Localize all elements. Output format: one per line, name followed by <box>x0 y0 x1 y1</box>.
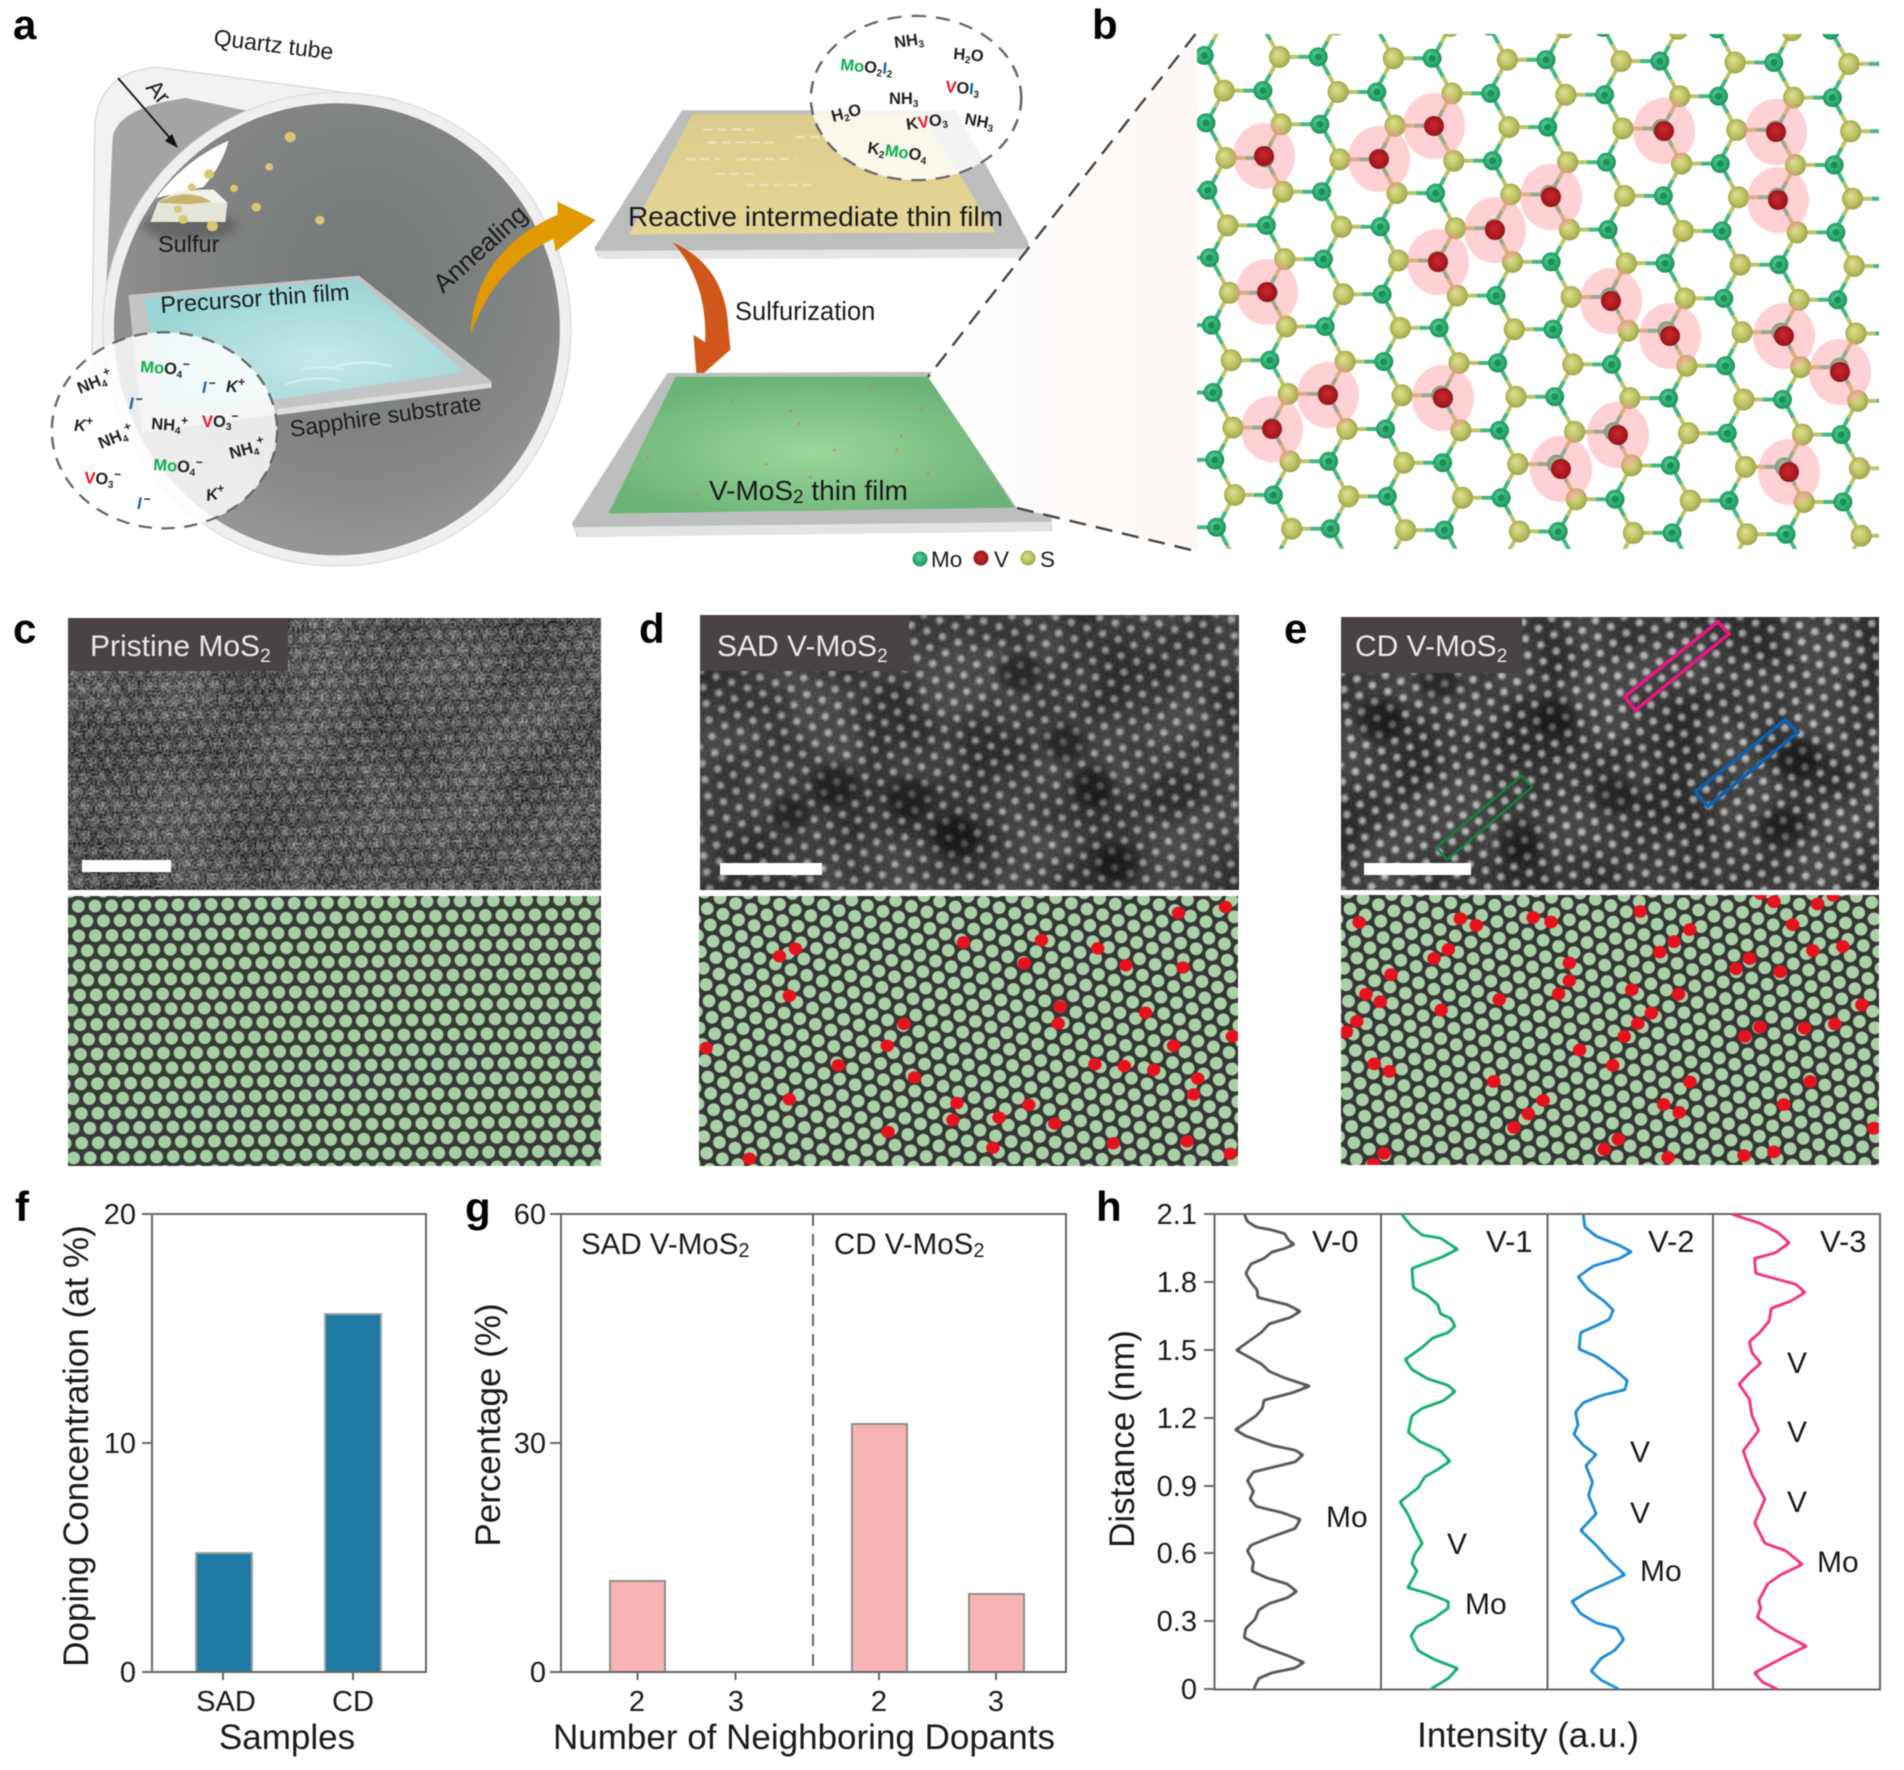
axes frame and ticks g <box>550 1214 1066 1680</box>
intermediate species labels: I <box>882 60 888 78</box>
ions in precursor: K <box>205 485 219 505</box>
y tick labels h: 0.6 <box>1157 1538 1197 1570</box>
y tick labels g: 30 <box>514 1428 546 1460</box>
ions in precursor: NH <box>151 415 176 435</box>
honeycomb lattice <box>1196 33 1880 550</box>
intermediate species labels: 3 <box>942 119 949 131</box>
ions in precursor: + <box>101 364 112 379</box>
arrow: annealing <box>471 202 596 335</box>
ions in precursor: − <box>136 392 143 406</box>
curve labels h: V-2 <box>1648 1224 1695 1259</box>
panel: d SAD V-MoS2 <box>639 605 1239 1166</box>
curve labels h: V <box>1630 1436 1650 1469</box>
panel: b atomic lattice <box>1090 0 1904 638</box>
axes frame and ticks h <box>1204 1214 1880 1690</box>
curve labels h: Mo <box>1465 1588 1507 1621</box>
group label: CD V-MoS2: CD V-MoS <box>834 1228 973 1261</box>
legend: atoms: S <box>1040 547 1055 572</box>
intermediate species labels: NH <box>889 90 913 108</box>
ions in precursor: VO <box>202 413 226 431</box>
panel label b: b <box>1092 1 1118 48</box>
group label: SAD V-MoS2: SAD V-MoS <box>581 1228 738 1261</box>
ions in precursor: VO <box>84 469 109 489</box>
x axis title h: Intensity (a.u.) <box>1417 1716 1639 1755</box>
ions in precursor: − <box>195 455 203 469</box>
scale bar e <box>1364 863 1471 875</box>
group label: CD V-MoS2: 2 <box>973 1240 984 1262</box>
ions in precursor: + <box>216 481 225 496</box>
x tick labels f: SAD <box>196 1686 256 1718</box>
ions in precursor: 4 <box>189 468 196 479</box>
y tick labels g <box>514 1199 546 1689</box>
curve labels h: V <box>1787 1347 1807 1380</box>
ions in precursor: − <box>209 376 216 390</box>
curve labels h: V-0 <box>1312 1224 1359 1259</box>
label: Precursor thin film: Precursor thin film <box>160 279 350 318</box>
ions in precursor: NH <box>96 427 125 453</box>
image title: SAD V-MoS2: 2 <box>877 646 888 667</box>
ions in precursor: K <box>226 378 238 396</box>
x tick labels g: 2 <box>871 1686 887 1718</box>
panel: c pristine MoS2 <box>13 605 601 1166</box>
ions in precursor: I <box>137 495 142 513</box>
curve labels h: Mo <box>1326 1501 1368 1534</box>
arrow: sulfurization <box>673 242 730 379</box>
label: Sulfurization: Sulfurization <box>735 298 875 326</box>
curve labels h: Mo <box>1817 1546 1859 1579</box>
sulfur boat and vapour dots <box>150 132 325 231</box>
curve: V-1 <box>1400 1214 1458 1690</box>
intermediate species labels: MoO <box>840 56 878 77</box>
vanadium dopant halos <box>1233 93 1871 505</box>
y tick labels f: 0 <box>120 1657 136 1689</box>
precursor film on sapphire substrate <box>129 276 491 433</box>
intermediate species labels: NH <box>893 31 919 52</box>
zoom wedge from film to lattice <box>928 34 1197 551</box>
image title: Pristine MoS2 <box>68 618 288 671</box>
ions in precursor: I <box>202 379 207 397</box>
STEM image d <box>700 615 1239 890</box>
ions in precursor: − <box>231 409 238 423</box>
image title: Pristine MoS2: 2 <box>260 646 271 667</box>
panel: g neighboring dopants bar chart <box>465 1184 1066 1757</box>
ions in precursor: MoO <box>153 456 191 477</box>
bar: CD <box>325 1314 381 1672</box>
ions in precursor: + <box>86 414 93 428</box>
curve labels h: V <box>1787 1486 1807 1519</box>
ions in precursor: − <box>182 357 190 371</box>
x axis title f: Samples <box>219 1718 355 1757</box>
curve labels h: V <box>1630 1497 1650 1530</box>
y axis title h: Distance (nm) <box>1103 1330 1142 1548</box>
intermediate species labels: O <box>846 101 863 121</box>
curve: V-2 <box>1572 1214 1632 1690</box>
panel: e CD V-MoS2 <box>1284 605 1881 1171</box>
intermediate species labels: K <box>866 139 881 159</box>
ions in precursor: 3 <box>107 480 114 491</box>
intermediate species labels: 2 <box>964 55 971 67</box>
atom map e with V sites <box>1340 887 1881 1171</box>
ions in precursor: 3 <box>226 422 232 433</box>
panel: a synthesis schematic <box>13 1 1055 572</box>
intermediate species labels: O <box>907 145 923 164</box>
arrow: Ar gas flow <box>118 75 178 148</box>
label: V-MoS2 thin film: 2 <box>793 487 804 508</box>
label: V-MoS2 thin film: thin film <box>804 475 908 506</box>
curve labels h: V-1 <box>1486 1224 1533 1259</box>
intermediate species labels: KVO <box>905 111 943 134</box>
intermediate species labels: 2 <box>876 68 883 80</box>
x tick labels f <box>196 1686 374 1718</box>
panel label c: c <box>13 605 36 652</box>
x axis title g: Number of Neighboring Dopants <box>553 1718 1055 1757</box>
ions in precursor: MoO <box>140 358 178 379</box>
x tick labels g: 3 <box>988 1686 1004 1718</box>
y tick labels h: 0 <box>1181 1674 1197 1706</box>
ions in precursor: 4 <box>174 426 181 437</box>
y tick labels h: 1.5 <box>1157 1335 1197 1367</box>
y axis title f: Doping Concentration (at %) <box>57 1225 96 1667</box>
panel label g: g <box>465 1184 491 1231</box>
intermediate species labels: H <box>829 105 846 126</box>
arrow: Ar gas flow: Ar <box>141 75 176 109</box>
atom map d with V sites <box>699 896 1239 1166</box>
line-profile box: V-3 <box>1625 622 1729 710</box>
y tick labels f: 10 <box>104 1428 136 1460</box>
ions in precursor: 4 <box>253 446 261 459</box>
image title: SAD V-MoS2: SAD V-MoS <box>717 630 877 663</box>
bar: CD 3 <box>969 1594 1024 1672</box>
y tick labels g: 60 <box>514 1199 546 1231</box>
STEM image c <box>68 618 601 890</box>
callout: intermediate species circle <box>811 16 1021 180</box>
intermediate species labels: 2 <box>878 150 885 161</box>
intermediate species labels: 4 <box>920 156 927 167</box>
panel label d: d <box>639 605 665 652</box>
y tick labels f: 20 <box>104 1199 136 1231</box>
bar: CD 2 <box>852 1424 907 1672</box>
y tick labels h: 0.3 <box>1157 1606 1197 1638</box>
legend: atoms: Mo <box>931 547 962 572</box>
label: Sulfur: Sulfur <box>158 231 220 257</box>
label: Annealing: Annealing <box>427 199 533 298</box>
panel: h intensity line profiles <box>1096 1183 1880 1755</box>
label: Reactive intermediate thin film: Reactive intermediate thin film <box>628 201 1003 232</box>
label: Sapphire substrate: Sapphire substrate <box>288 389 483 442</box>
bar: SAD <box>196 1553 252 1672</box>
label: Quartz tube: Quartz tube <box>212 24 335 65</box>
ions in precursor: − <box>114 467 122 482</box>
intermediate species labels: 2 <box>886 69 893 81</box>
y tick labels f <box>104 1199 136 1689</box>
x tick labels g: 2 <box>629 1686 645 1718</box>
curve labels h: V <box>1787 1416 1807 1449</box>
image title: CD V-MoS2: 2 <box>1497 646 1507 667</box>
ions in precursor <box>73 354 268 513</box>
curve labels h: V-3 <box>1820 1224 1867 1259</box>
intermediate species labels: H <box>953 45 966 64</box>
group label: SAD V-MoS2: 2 <box>738 1240 750 1262</box>
y axis title g: Percentage (%) <box>469 1303 508 1547</box>
intermediate species labels: 3 <box>918 39 925 51</box>
intermediate species labels: NH <box>963 110 990 132</box>
ions in precursor: − <box>144 492 151 506</box>
legend: atoms <box>912 547 1055 572</box>
x tick labels g <box>629 1686 1004 1718</box>
vanadium dopant atoms <box>1254 116 1850 482</box>
scale bar c <box>82 860 171 872</box>
line-profile box: V-1 <box>1436 776 1532 860</box>
panel label h: h <box>1096 1183 1122 1230</box>
panel label e: e <box>1284 605 1307 652</box>
x tick labels g: 3 <box>728 1686 744 1718</box>
V-MoS2 film <box>572 372 1052 537</box>
intermediate species labels <box>829 30 996 167</box>
scale bar d <box>720 863 822 875</box>
callout: precursor ions circle <box>52 332 277 528</box>
ions in precursor: 4 <box>121 433 131 446</box>
image title: SAD V-MoS2 <box>700 615 909 671</box>
ions in precursor: K <box>74 417 86 435</box>
atom map c <box>68 896 601 1166</box>
y tick labels h <box>1157 1199 1197 1706</box>
y tick labels g: 0 <box>530 1657 546 1689</box>
y tick labels h: 1.8 <box>1157 1267 1197 1299</box>
ions in precursor: NH <box>227 439 255 463</box>
panel label a: a <box>13 1 37 48</box>
curve: V-0 <box>1235 1214 1310 1690</box>
axes frame and ticks f <box>142 1214 426 1680</box>
image title: CD V-MoS2: CD V-MoS <box>1355 630 1497 663</box>
ions in precursor: + <box>238 375 245 389</box>
reactive intermediate film <box>595 110 1028 259</box>
x tick labels f: CD <box>332 1686 374 1718</box>
y tick labels h: 0.9 <box>1157 1471 1197 1503</box>
line-profile box: V-2 <box>1696 720 1798 806</box>
bar: SAD 2 <box>610 1581 665 1672</box>
panel label f: f <box>15 1183 30 1230</box>
intermediate species labels: 3 <box>986 123 994 135</box>
intermediate species labels: VOI <box>945 78 975 98</box>
curve labels h: V <box>1447 1528 1467 1561</box>
intermediate species labels: 3 <box>973 89 980 101</box>
curve: V-3 <box>1731 1214 1806 1690</box>
ions in precursor: 4 <box>176 370 183 381</box>
curve labels h: Mo <box>1640 1555 1682 1588</box>
y tick labels h: 1.2 <box>1157 1403 1197 1435</box>
ions in precursor: NH <box>75 372 104 398</box>
quartz tube body <box>92 67 571 566</box>
STEM image e <box>1341 617 1879 890</box>
intermediate species labels: 3 <box>913 99 919 110</box>
label: V-MoS2 thin film: V-MoS <box>709 475 793 506</box>
image title: Pristine MoS2: Pristine MoS <box>90 630 260 663</box>
curve labels h <box>1312 1224 1867 1621</box>
y tick labels h: 2.1 <box>1157 1199 1197 1231</box>
intermediate species labels: 2 <box>843 113 852 125</box>
image title: CD V-MoS2 <box>1341 617 1522 673</box>
intermediate species labels: Mo <box>884 142 910 163</box>
legend: atoms: V <box>994 547 1009 572</box>
ions in precursor: + <box>181 413 189 428</box>
ions in precursor: + <box>255 432 265 448</box>
panel: f doping concentration bar chart <box>15 1183 426 1757</box>
intermediate species labels: O <box>970 47 985 66</box>
ions in precursor: + <box>122 419 133 434</box>
ions in precursor: I <box>129 395 134 413</box>
ions in precursor: 4 <box>100 378 110 391</box>
